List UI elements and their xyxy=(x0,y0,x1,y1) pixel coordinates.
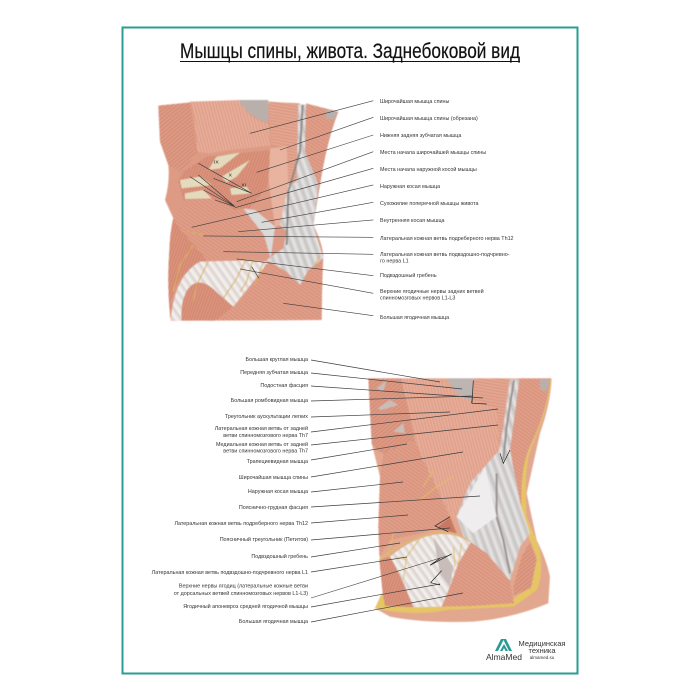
upper figure: left flank muscles xyxy=(158,102,197,172)
lower labels: Латеральная кожная ветвь подвздошно-подчревного нерва L1 xyxy=(152,570,308,576)
upper figure: rib numerals: IX xyxy=(214,160,219,166)
lower figure: right erector xyxy=(508,378,551,507)
upper figure: external oblique xyxy=(173,198,266,260)
upper labels: Места начала наружной косой мышцы xyxy=(380,166,477,173)
upper figure: cut latissimus xyxy=(268,147,288,227)
lower labels: Наружная косая мышца xyxy=(248,489,308,495)
lower labels xyxy=(152,357,308,625)
upper figure: lower left muscle xyxy=(168,218,207,321)
upper figure: right flank xyxy=(305,103,338,225)
upper figure: transversus tendon xyxy=(243,208,275,258)
lower labels: Передняя зубчатая мышца xyxy=(240,370,308,376)
upper labels: Наружная косая мышца xyxy=(380,184,440,190)
lower figure: external oblique xyxy=(378,440,450,557)
poster frame xyxy=(122,28,578,674)
lower figure: thoracolumbar fascia xyxy=(457,379,530,581)
lower figure: lumbar triangle xyxy=(437,517,457,533)
logo: AlmaMed: almamed.su xyxy=(530,655,555,660)
lower figure: gray tab xyxy=(540,379,550,392)
logo: AlmaMed: Медицинская xyxy=(519,639,565,648)
icon: logo mark xyxy=(495,639,512,651)
upper figure: gluteus maximus xyxy=(207,258,323,321)
upper labels: Широчайшая мышца спины (обрезана) xyxy=(380,115,478,122)
upper figure: erector muscle xyxy=(268,102,300,185)
lower labels: Верхние нервы ягодиц (латеральные кожные ветви xyxy=(179,584,308,590)
upper labels: Внутренняя косая мышца xyxy=(380,218,445,224)
upper labels: Места начала широчайшей мышцы спины xyxy=(380,149,486,156)
lower labels: Широчайшая мышца спины xyxy=(239,474,308,481)
lower figure: left serratus muscles xyxy=(368,378,415,453)
lower labels: Большая ягодичная мышца xyxy=(239,619,308,625)
upper figure: gray tab xyxy=(325,110,337,120)
upper figure: rib numerals xyxy=(214,160,246,189)
upper figure: latissimus dorsi xyxy=(190,100,271,153)
upper labels: Нижняя задняя зубчатая мышца xyxy=(380,133,461,139)
lower labels: ветви спинномозгового нерва Th7 xyxy=(223,448,308,454)
lower labels: от дорсальных ветвей спинномозговых нервов L1-L3) xyxy=(174,590,308,597)
lower labels: ветви спинномозгового нерва Th7 xyxy=(223,433,308,439)
logo: AlmaMed: техника xyxy=(528,646,556,655)
lower labels: Большая круглая мышца xyxy=(246,357,308,363)
title: Мышцы спины, живота. Заднебоковой вид xyxy=(180,40,520,63)
upper labels: Верхние ягодичные нервы задних ветвей xyxy=(380,288,484,295)
upper figure: lower lateral muscle xyxy=(181,283,233,321)
lower figure: skin base xyxy=(368,378,552,622)
lower figure: lower left muscle xyxy=(379,557,413,607)
upper figure: rib strips xyxy=(180,153,251,199)
upper labels: го нерва L1 xyxy=(380,258,409,264)
lower labels: Ягодичный апоневроз средней ягодичной мышцы xyxy=(183,603,308,610)
lower labels: Пояснично-грудная фасция xyxy=(239,505,308,511)
lower leader lines xyxy=(311,360,498,622)
logo: AlmaMed: AlmaMed xyxy=(486,652,522,662)
upper anatomical figure xyxy=(158,100,373,321)
upper figure: serratus posterior inferior xyxy=(178,150,270,210)
lower figure: internal black leaders xyxy=(430,381,510,585)
upper labels xyxy=(380,98,514,321)
lower figure: scapula fascia patches xyxy=(377,380,405,433)
lower labels: Латеральная кожная ветвь подреберного нерва Th12 xyxy=(174,521,308,527)
lower anatomical figure xyxy=(368,378,552,622)
logo: AlmaMed xyxy=(486,639,565,662)
lower figure: trapezius upper xyxy=(473,378,508,450)
lower figure: crest line and nerves xyxy=(379,470,471,580)
lower labels: Поясничный треугольник (Петитов) xyxy=(220,536,308,543)
lower figure: latissimus dorsi xyxy=(402,378,499,517)
upper figure: leader lines xyxy=(190,101,373,316)
upper labels: Подвздошный гребень xyxy=(380,272,437,279)
upper labels: спинномозговых нервов L1-L3 xyxy=(380,296,455,302)
upper figure: body base xyxy=(158,102,338,321)
upper labels: Широчайшая мышца спины xyxy=(380,98,449,105)
lower figure: shadow fold xyxy=(433,537,453,587)
lower labels: Подостная фасция xyxy=(260,383,308,389)
lower figure: gluteus maximus xyxy=(442,543,514,607)
lower labels: Большая ромбовидная мышца xyxy=(231,398,308,404)
upper labels: Большая ягодичная мышца xyxy=(380,315,449,321)
lower figure: fascia dark streak xyxy=(497,380,514,573)
lower labels: Трапециевидная мышца xyxy=(247,459,308,465)
upper labels: Сухожилие поперечной мышцы живота xyxy=(380,200,478,207)
upper figure: scapula fascia xyxy=(238,100,268,122)
lower figure: gluteal white aponeurosis xyxy=(390,534,471,607)
lower labels: Треугольник аускультации легких xyxy=(225,414,308,420)
upper figure: rib numerals: X xyxy=(229,173,233,179)
lower figure: fascia bright area xyxy=(457,467,497,533)
upper figure: iliac crest white band xyxy=(171,261,268,321)
upper labels: Латеральная кожная ветвь подвздошно-подчревно- xyxy=(380,252,510,258)
lower figure: yellow fat border xyxy=(375,378,552,613)
lower figure: scapula gray xyxy=(447,378,473,401)
lower labels: Медиальная кожная ветвь от задней xyxy=(216,441,308,448)
upper labels: Латеральная кожная ветвь подреберного нерва Th12 xyxy=(380,236,514,242)
upper figure: central fascia xyxy=(267,104,323,285)
upper figure: nerves xyxy=(173,232,320,302)
lower labels: Подвздошный гребень xyxy=(251,553,308,560)
lower labels: Латеральная кожная ветвь от задней xyxy=(215,425,308,432)
upper figure: fascia streak xyxy=(287,105,303,245)
lower figure: gluteus medius xyxy=(513,542,537,595)
upper figure: rib numerals: XI xyxy=(241,183,246,189)
